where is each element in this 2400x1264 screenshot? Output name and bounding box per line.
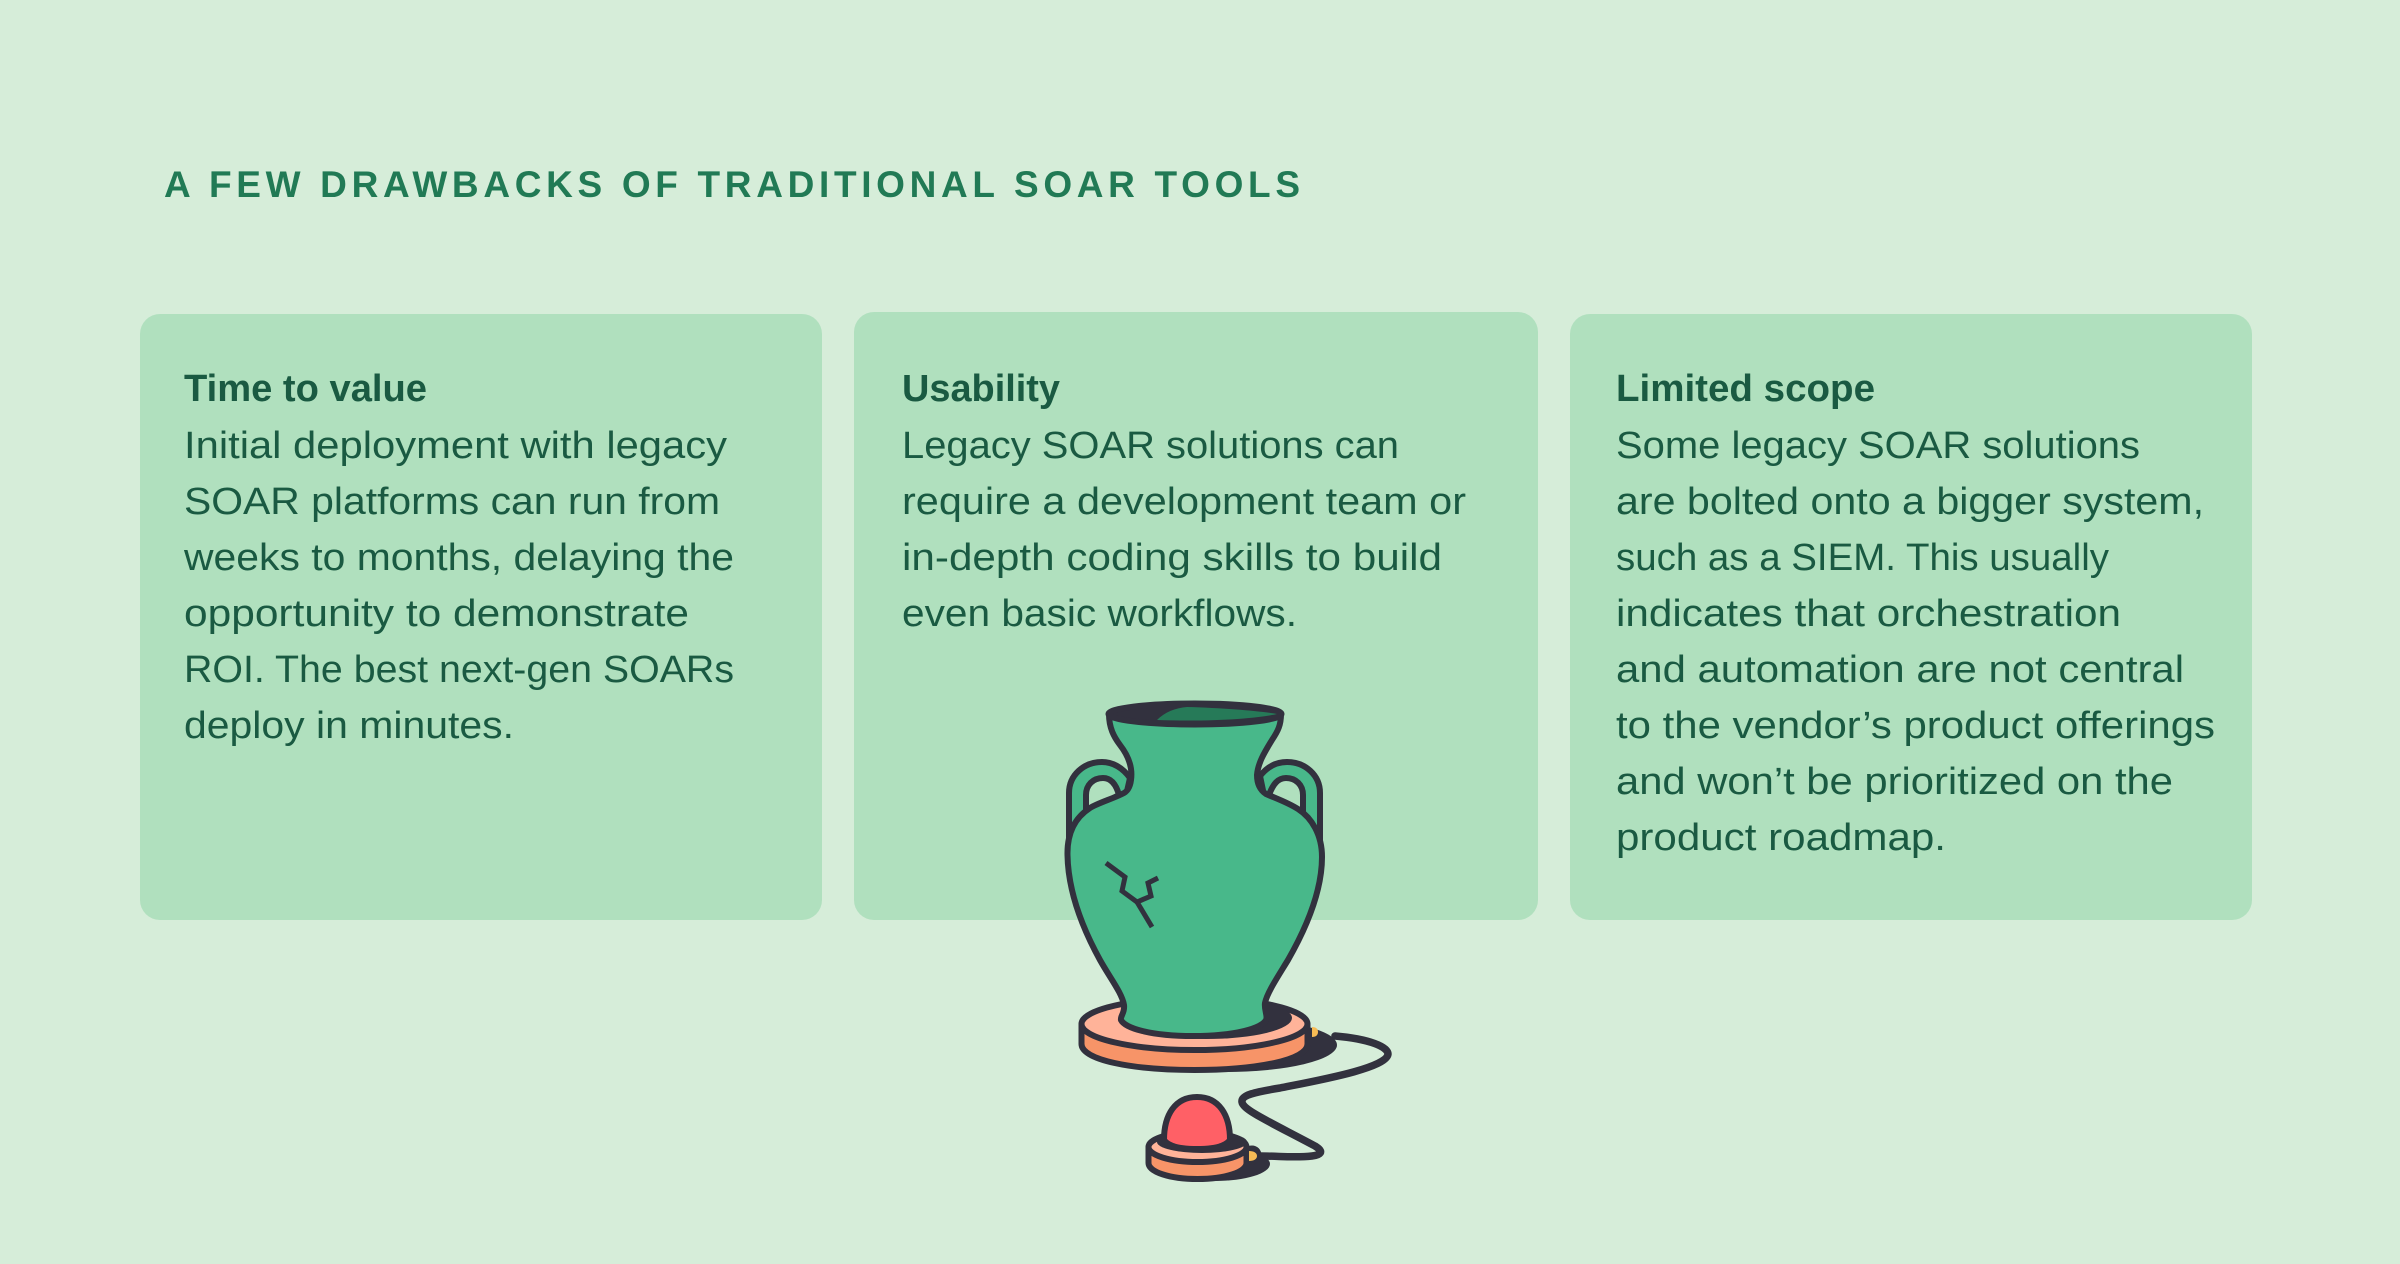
panel: time to value xyxy=(140,314,822,920)
button shadow xyxy=(1160,1147,1270,1181)
text block: time to value: weeks to months, delaying the xyxy=(183,537,734,579)
cable xyxy=(1242,1036,1388,1157)
vase interior xyxy=(1157,707,1277,721)
heading: limited scope: Limited scope xyxy=(1616,368,1875,410)
button base xyxy=(1148,1132,1246,1179)
text block: time to value: Initial deployment with legacy xyxy=(184,425,727,467)
text block: limited scope: indicates that orchestration xyxy=(1616,593,2121,635)
text block: time to value: SOAR platforms can run from xyxy=(184,481,720,523)
text block: time to value xyxy=(183,425,734,747)
vase rim xyxy=(1108,704,1282,724)
button connector xyxy=(1249,1151,1257,1161)
text block: usability: Legacy SOAR solutions can xyxy=(902,425,1399,467)
title: A FEW DRAWBACKS OF TRADITIONAL SOAR TOOLS xyxy=(164,164,1300,205)
panel: usability xyxy=(854,312,1538,920)
left handle xyxy=(1069,762,1130,845)
icon: cracked vase on pressure plate with button xyxy=(1067,704,1388,1181)
heading: usability: Usability xyxy=(902,368,1060,410)
plate recess xyxy=(1120,997,1292,1039)
plate xyxy=(1082,998,1308,1070)
button dome xyxy=(1164,1097,1230,1149)
text block: limited scope: product roadmap. xyxy=(1616,817,1946,859)
plate connector xyxy=(1312,1027,1318,1037)
text block: limited scope: such as a SIEM. This usually xyxy=(1616,537,2109,579)
text block: time to value: opportunity to demonstrate xyxy=(184,593,689,635)
text block: usability: require a development team or xyxy=(902,481,1466,523)
text block: usability xyxy=(902,425,1466,635)
text block: limited scope xyxy=(1616,425,2215,859)
plate shadow xyxy=(1113,1018,1337,1072)
text block: time to value: ROI. The best next-gen SOARs xyxy=(184,649,734,691)
text block: limited scope: and automation are not central xyxy=(1616,649,2184,691)
heading: time to value: Time to value xyxy=(184,368,427,410)
text block: time to value: deploy in minutes. xyxy=(184,705,514,747)
text block: usability: in-depth coding skills to build xyxy=(902,537,1442,579)
vase body xyxy=(1067,714,1322,1036)
text block: limited scope: to the vendor’s product offerings xyxy=(1616,705,2215,747)
text block: limited scope: and won’t be prioritized on the xyxy=(1616,761,2173,803)
text block: limited scope: are bolted onto a bigger system, xyxy=(1616,481,2204,523)
right handle xyxy=(1260,762,1320,845)
text block: usability: even basic workflows. xyxy=(902,593,1297,635)
text block: limited scope: Some legacy SOAR solutions xyxy=(1616,425,2140,467)
crack xyxy=(1106,863,1158,927)
panel: limited scope xyxy=(1570,314,2252,920)
button recess xyxy=(1157,1131,1247,1153)
